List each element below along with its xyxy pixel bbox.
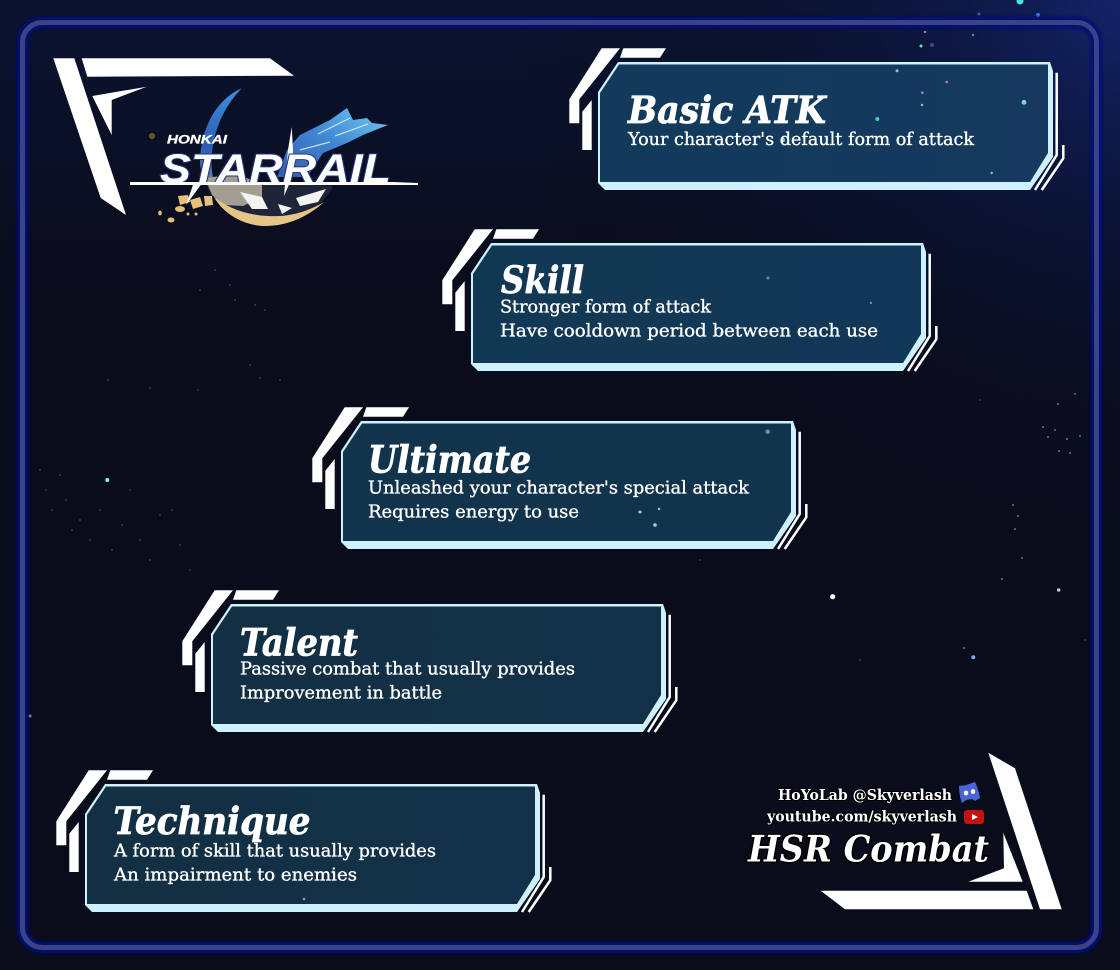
credit: YouTube URL: youtube.com/skyverlash <box>766 808 957 826</box>
description: Requires energy to use <box>368 502 579 523</box>
left brackets <box>56 770 153 872</box>
card: Ultimate <box>312 407 806 549</box>
title: Ultimate <box>368 438 531 482</box>
right lines <box>778 432 806 549</box>
card body <box>341 421 796 549</box>
page title: HSR Combat: HSR Combat <box>747 829 989 871</box>
gold fragments <box>158 195 213 222</box>
description: Unleashed your character's special attack <box>368 478 750 499</box>
card: Basic ATK <box>569 48 1063 190</box>
card: Skill <box>442 229 936 371</box>
right lines <box>908 254 936 371</box>
planet body <box>205 182 333 225</box>
description: Stronger form of attack <box>500 297 712 318</box>
right lines <box>648 615 676 732</box>
left brackets <box>182 590 279 692</box>
title: Basic ATK <box>627 88 828 132</box>
credit: HoYoLab handle: HoYoLab @Skyverlash <box>778 786 952 804</box>
card: Technique <box>56 770 550 912</box>
description: Your character's default form of attack <box>627 129 975 150</box>
icon: discord <box>959 782 980 803</box>
left brackets <box>312 407 409 509</box>
description <box>368 478 750 523</box>
HONKAI wordmark: HONKAI <box>167 134 228 146</box>
wing <box>277 108 388 177</box>
planet white patches <box>240 189 326 214</box>
card body <box>471 243 926 371</box>
logo frame top-left <box>53 58 294 215</box>
gold rim <box>214 197 324 226</box>
spikes <box>186 127 293 205</box>
left brackets <box>442 229 539 331</box>
description: A form of skill that usually provides <box>113 841 436 862</box>
description <box>113 841 436 886</box>
card: Talent <box>182 590 676 732</box>
description <box>500 297 878 342</box>
description: An impairment to enemies <box>113 865 357 886</box>
icon: youtube <box>964 810 984 824</box>
description: Improvement in battle <box>240 683 442 704</box>
underline <box>130 182 418 185</box>
planet tan patches <box>205 174 262 206</box>
wing highlights <box>300 118 368 150</box>
right lines <box>1035 73 1063 190</box>
card body <box>598 62 1053 190</box>
description <box>240 659 575 704</box>
background stars <box>28 0 1086 718</box>
description: Passive combat that usually provides <box>240 659 575 680</box>
title: Technique <box>114 799 310 843</box>
title: Talent <box>240 620 358 664</box>
logo: Honkai Star Rail <box>130 88 418 226</box>
STARRAIL wordmark: STARRAIL <box>160 146 391 192</box>
card body <box>211 604 666 732</box>
card body <box>85 784 540 912</box>
title: Skill <box>501 258 584 302</box>
credit frame bottom-right <box>821 753 1062 909</box>
description: Have cooldown period between each use <box>500 321 878 342</box>
right lines <box>522 795 550 912</box>
crescent band <box>200 88 242 184</box>
left brackets <box>569 48 666 150</box>
